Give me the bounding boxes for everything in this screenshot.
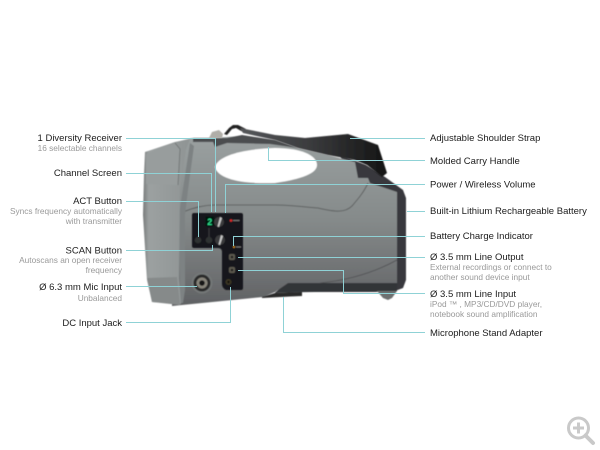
- main grey shell: [172, 136, 397, 306]
- handle opening: [215, 148, 317, 183]
- label: Power / Wireless Volume: Power / Wireless Volume: [430, 180, 536, 190]
- label: 3.5 mm Line Output: External recordings or connect to: [430, 262, 552, 272]
- label: Microphone Stand Adapter: Microphone Stand Adapter: [430, 328, 542, 339]
- control panel: [192, 213, 243, 290]
- label: 3.5 mm Line Input: Ø 3.5 mm Line Input: [430, 289, 516, 300]
- label: Channel Screen: Channel Screen: [54, 168, 122, 179]
- speaker body: [143, 135, 406, 306]
- label: SCAN Button: Autoscans an open receiver: [19, 255, 122, 265]
- lower dark strip: [275, 283, 397, 292]
- label: ACT Button: Syncs frequency automatically: [10, 206, 123, 216]
- label: DC Input Jack: DC Input Jack: [62, 318, 122, 329]
- dc jack: [226, 279, 232, 285]
- label: Molded Carry Handle: Molded Carry Handle: [430, 156, 520, 167]
- label: 6.3 mm Mic Input: Ø 6.3 mm Mic Input: [39, 282, 122, 293]
- icon: shoulder strap: [209, 125, 387, 177]
- label: 1 Diversity Receiver: 1 Diversity Receiver: [38, 133, 122, 144]
- speaker device: [143, 125, 406, 306]
- body contour line: [183, 183, 368, 212]
- label: 1 Diversity Receiver: 16 selectable channels: [38, 143, 122, 153]
- microphone stand adapter: [262, 292, 302, 298]
- label: ACT Button: [10, 196, 123, 226]
- rear foot: [377, 291, 397, 300]
- label: Built-in Lithium Rechargeable Battery: Built-in Lithium Rechargeable Battery: [430, 206, 587, 217]
- top dark band: [193, 135, 298, 148]
- label: 3.5 mm Line Input: [430, 289, 542, 319]
- label: 6.3 mm Mic Input: [39, 282, 122, 303]
- charge led: [233, 246, 235, 248]
- label: Battery Charge Indicator: Battery Charge Indicator: [430, 231, 533, 242]
- label: ACT Button: with transmitter: [65, 216, 122, 226]
- label: SCAN Button: frequency: [86, 265, 123, 275]
- line jacks: [229, 254, 235, 260]
- act and scan buttons: [195, 237, 201, 243]
- label: 3.5 mm Line Input: notebook sound amplification: [430, 309, 538, 319]
- label: 3.5 mm Line Output: [430, 252, 552, 282]
- label: 3.5 mm Line Input: iPod ™ , MP3/CD/DVD player,: [430, 299, 542, 309]
- power led: [230, 219, 232, 222]
- label: ACT Button: ACT Button: [73, 196, 122, 207]
- label: SCAN Button: [19, 246, 123, 275]
- front cap: [143, 139, 190, 304]
- volume knobs: [214, 217, 224, 227]
- label: SCAN Button: SCAN Button: [66, 246, 122, 256]
- stripe by cap: [179, 143, 194, 303]
- label: 3.5 mm Line Output: Ø 3.5 mm Line Output: [430, 252, 524, 263]
- label: Adjustable Shoulder Strap: Adjustable Shoulder Strap: [430, 133, 540, 144]
- channel screen: 2: [207, 217, 212, 227]
- mic input jack: [192, 272, 212, 294]
- icon: zoom magnifier: [568, 418, 593, 443]
- label: 6.3 mm Mic Input: Unbalanced: [78, 293, 122, 303]
- leader lines: [126, 138, 425, 332]
- label: 3.5 mm Line Output: another sound device input: [430, 272, 530, 282]
- label: 1 Diversity Receiver: [38, 133, 122, 153]
- back dark shell: [275, 155, 406, 293]
